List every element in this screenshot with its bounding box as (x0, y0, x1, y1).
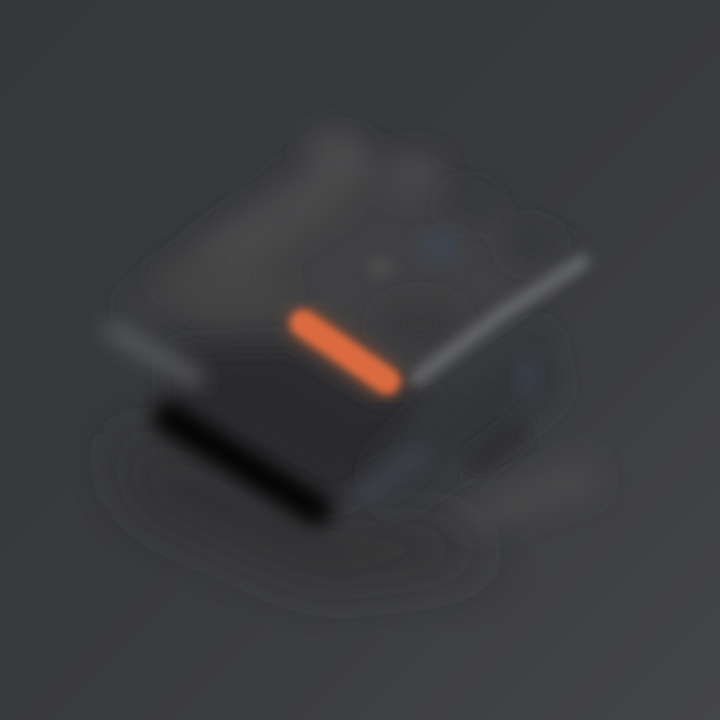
screen dark spots (380, 191, 554, 347)
screen light patches (150, 130, 443, 320)
blue lower band (365, 455, 420, 495)
left lighter edge (113, 330, 195, 378)
right side face (370, 325, 560, 510)
orange button (303, 323, 387, 381)
top screen face (120, 135, 575, 370)
front dark face (170, 345, 440, 505)
grey dot (368, 257, 392, 277)
right face dark stripe (475, 430, 520, 465)
blue side glow (518, 351, 538, 399)
cast shadow (120, 430, 490, 580)
right edge highlight (417, 262, 582, 378)
lower black edge (168, 417, 317, 510)
blue screen indicator (420, 232, 460, 262)
lower-right reflection (450, 455, 600, 530)
device body (113, 130, 582, 510)
orange glow (303, 323, 385, 380)
